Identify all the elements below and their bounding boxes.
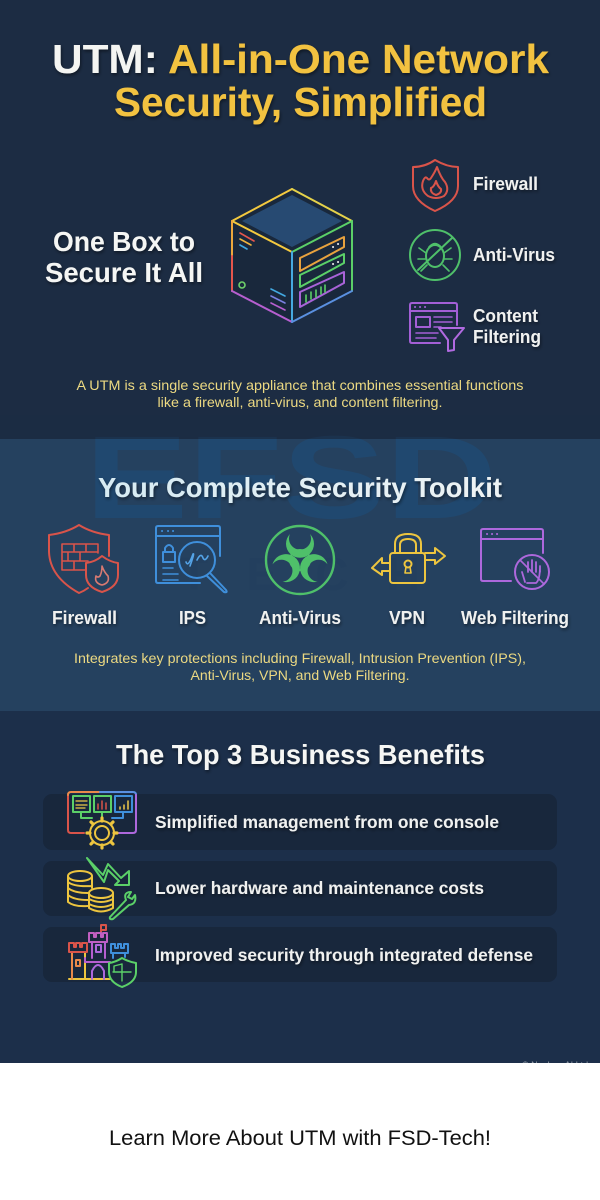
background: top section <box>0 0 600 439</box>
label: anti-virus: Anti-Virus <box>473 245 555 265</box>
icon: VPN lock <box>372 534 445 583</box>
label: content filtering <box>473 306 541 347</box>
text: UTM description: A UTM is a single security appliance that combines essential functions <box>76 377 524 393</box>
labels: toolkit items: VPN <box>389 608 425 628</box>
server unit 2 <box>300 254 344 287</box>
icon: anti-virus bug <box>410 230 460 280</box>
watermark: EFSD <box>85 412 497 544</box>
heading: one box: One Box to <box>53 226 195 257</box>
label: content filtering: Filtering <box>473 327 541 347</box>
icon: web filtering <box>481 529 549 589</box>
labels: toolkit items: Web Filtering <box>461 608 569 628</box>
heading: one box: Secure It All <box>45 257 203 288</box>
icon: castle defense <box>69 925 136 987</box>
background: benefits section <box>0 711 600 1063</box>
label: content filtering: Content <box>473 306 538 326</box>
icon: lower costs <box>68 858 135 919</box>
labels: toolkit items: Firewall <box>52 608 117 628</box>
text: toolkit description <box>74 650 526 683</box>
labels: toolkit items: Anti-Virus <box>259 608 341 628</box>
heading: benefits: The Top 3 Business Benefits <box>116 739 485 770</box>
heading: one box <box>45 226 203 288</box>
title: UTM: All-in-One Network <box>52 36 549 82</box>
panel: benefit 2: Lower hardware and maintenance costs <box>155 878 484 898</box>
watermark fade over top section <box>0 415 600 439</box>
icon: management console <box>68 792 136 848</box>
icon: IPS inspection <box>156 526 227 592</box>
white footer band <box>0 1063 600 1200</box>
text: toolkit description: Integrates key protections including Firewall, Intrusion Prevention (IPS), <box>74 650 526 666</box>
icon: biohazard <box>266 526 334 594</box>
text: UTM description <box>76 377 524 410</box>
panel: benefit 1: Simplified management from one console <box>155 812 499 832</box>
text: UTM description: like a firewall, anti-virus, and content filtering. <box>158 394 442 410</box>
title <box>52 36 549 125</box>
labels: toolkit items: IPS <box>179 608 206 628</box>
watermark <box>85 412 497 600</box>
server unit 3 <box>300 272 344 307</box>
icon: firewall toolkit <box>49 525 118 593</box>
icon: firewall shield <box>413 160 458 211</box>
background: toolkit section <box>0 439 600 711</box>
title: Security, Simplified <box>114 79 487 125</box>
text: toolkit description: Anti-Virus, VPN, and Web Filtering. <box>190 667 410 683</box>
watermark: TECH <box>180 548 420 600</box>
panel: benefit 2 <box>43 861 557 916</box>
icon: UTM appliance cube <box>232 189 352 322</box>
fragment: cropped credit text: © Nanban AI Ltd <box>522 1060 588 1070</box>
server unit 1 <box>300 237 344 271</box>
label: firewall: Firewall <box>473 174 538 194</box>
panel: benefit 1 <box>43 794 557 850</box>
labels: toolkit items <box>52 608 569 628</box>
heading: toolkit: Your Complete Security Toolkit <box>98 472 502 503</box>
panel: benefit 3 <box>43 927 557 982</box>
panel: benefit 3: Improved security through integrated defense <box>155 945 533 965</box>
footer text: Learn More About UTM with FSD-Tech! <box>109 1127 491 1150</box>
icon: content filter <box>410 303 464 351</box>
